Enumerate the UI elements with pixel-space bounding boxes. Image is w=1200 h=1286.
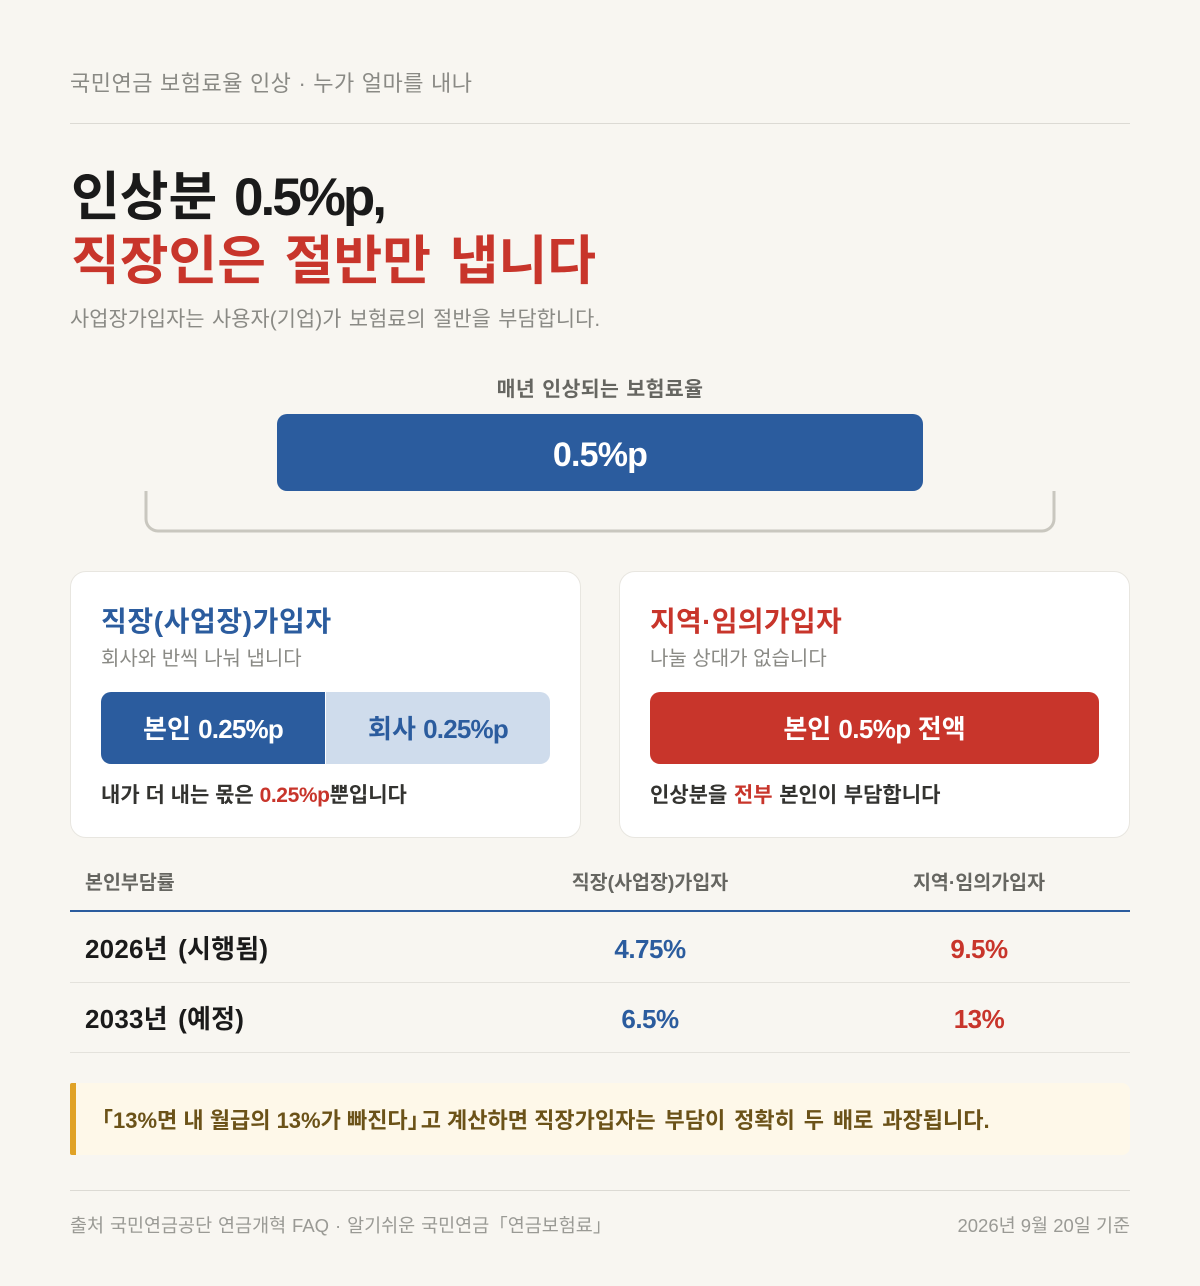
row: 2033: 6.5% [621,1004,679,1034]
regional note: 인상분을 전부 본인이 부담합니다 [650,784,940,807]
segment: self 0.25%p: 본인 0.25%p [143,714,283,744]
panel: employee subscribers [70,571,581,838]
segment: company 0.25%p: 회사 0.25%p [368,714,508,744]
row: 2026: 9.5% [950,934,1008,964]
employee note: 내가 더 내는 몫은 0.25%p뿐입니다 [101,784,407,807]
row: 2033 [70,983,1130,1053]
total bar label: 매년 인상되는 보험료율 [497,378,703,401]
callout [70,1083,1130,1155]
panel: regional subscribers [619,571,1130,838]
eyebrow heading: 국민연금 보험료율 인상 · 누가 얼마를 내나 [70,71,472,96]
regional heading: 지역·임의가입자 [650,606,842,637]
date footer: 2026년 9월 20일 기준 [957,1215,1130,1236]
row: 2033: 13% [954,1004,1004,1034]
title [71,168,596,291]
table header: 직장(사업장)가입자 [572,872,728,894]
table header: 본인부담률 [85,872,175,894]
table: self-burden rate [70,872,1130,1053]
bracket connector [144,491,1056,532]
table header: 지역·임의가입자 [913,872,1045,894]
full bar: self 0.5%p [650,692,1099,764]
row: 2026: 4.75% [614,934,686,964]
segment: company 0.25%p [326,692,550,764]
employee subheading: 회사와 반씩 나눠 냅니다 [101,648,302,670]
row: 2026: 2026년 (시행됨) [85,934,268,964]
title: 직장인은 절반만 냅니다 [71,232,596,291]
row: 2026 [70,914,1130,983]
title: 인상분 0.5%p, [71,168,384,227]
full bar: self 0.5%p: 본인 0.5%p 전액 [783,714,966,744]
callout text: 「13%면 내 월급의 13%가 빠진다」고 계산하면 직장가입자는 부담이 정확히 두 배로 과장됩니다. [91,1108,990,1133]
split bar [101,692,550,764]
total bar: 0.5%p [277,414,923,491]
segment: self 0.25%p [101,692,325,764]
employee heading: 직장(사업장)가입자 [101,606,332,637]
regional subheading: 나눌 상대가 없습니다 [650,648,827,670]
row: 2033: 2033년 (예정) [85,1004,244,1034]
subtitle: 사업장가입자는 사용자(기업)가 보험료의 절반을 부담합니다. [70,308,600,331]
total bar: 0.5%p: 0.5%p [553,436,647,474]
source footer: 출처 국민연금공단 연금개혁 FAQ · 알기쉬운 국민연금「연금보험료」 [70,1215,603,1236]
table header [70,860,1130,912]
